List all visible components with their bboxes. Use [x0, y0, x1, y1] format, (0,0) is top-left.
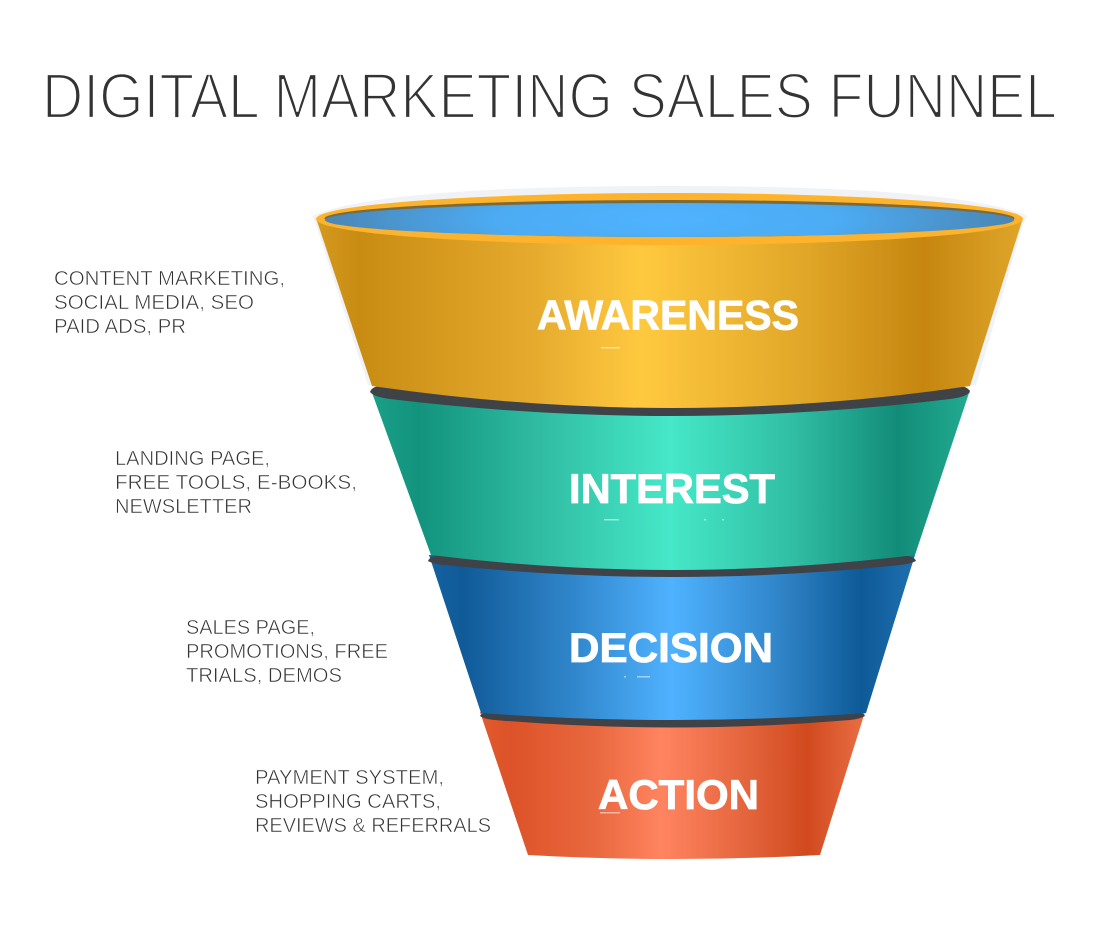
interest label: INTEREST: [569, 465, 775, 512]
text block: action tactics: PAYMENT SYSTEM,: [255, 766, 444, 789]
text block: decision tactics: TRIALS, DEMOS: [186, 664, 342, 687]
funnel shadow halo: [312, 186, 1027, 385]
funnel stage: interest: [371, 390, 970, 570]
text block: decision tactics: [186, 616, 388, 687]
funnel rim and opening: [316, 193, 1023, 245]
funnel stage: awareness: [316, 218, 1023, 408]
text block: action tactics: [255, 766, 491, 837]
awareness label: AWARENESS: [537, 292, 799, 338]
text block: awareness tactics: PAID ADS, PR: [54, 315, 186, 338]
funnel: [312, 186, 1027, 859]
text block: awareness tactics: SOCIAL MEDIA, SEO: [54, 291, 254, 314]
text block: decision tactics: SALES PAGE,: [186, 616, 315, 639]
rim: interest: [370, 386, 970, 416]
funnel stage: decision: [429, 555, 915, 720]
text block: awareness tactics: CONTENT MARKETING,: [54, 267, 285, 290]
text block: interest tactics: [115, 447, 357, 518]
rim: decision: [428, 556, 916, 577]
text block: awareness tactics: [54, 267, 285, 338]
funnel stage: action: [480, 712, 865, 859]
text block: interest tactics: NEWSLETTER: [115, 495, 252, 518]
text block: action tactics: SHOPPING CARTS,: [255, 790, 441, 813]
action label: ACTION: [598, 771, 759, 818]
rim: action: [480, 712, 865, 728]
decision label: DECISION: [569, 624, 773, 671]
text block: interest tactics: FREE TOOLS, E-BOOKS,: [115, 471, 357, 494]
text block: action tactics: REVIEWS & REFERRALS: [255, 814, 491, 837]
text block: decision tactics: PROMOTIONS, FREE: [186, 640, 388, 663]
text block: interest tactics: LANDING PAGE,: [115, 447, 270, 470]
